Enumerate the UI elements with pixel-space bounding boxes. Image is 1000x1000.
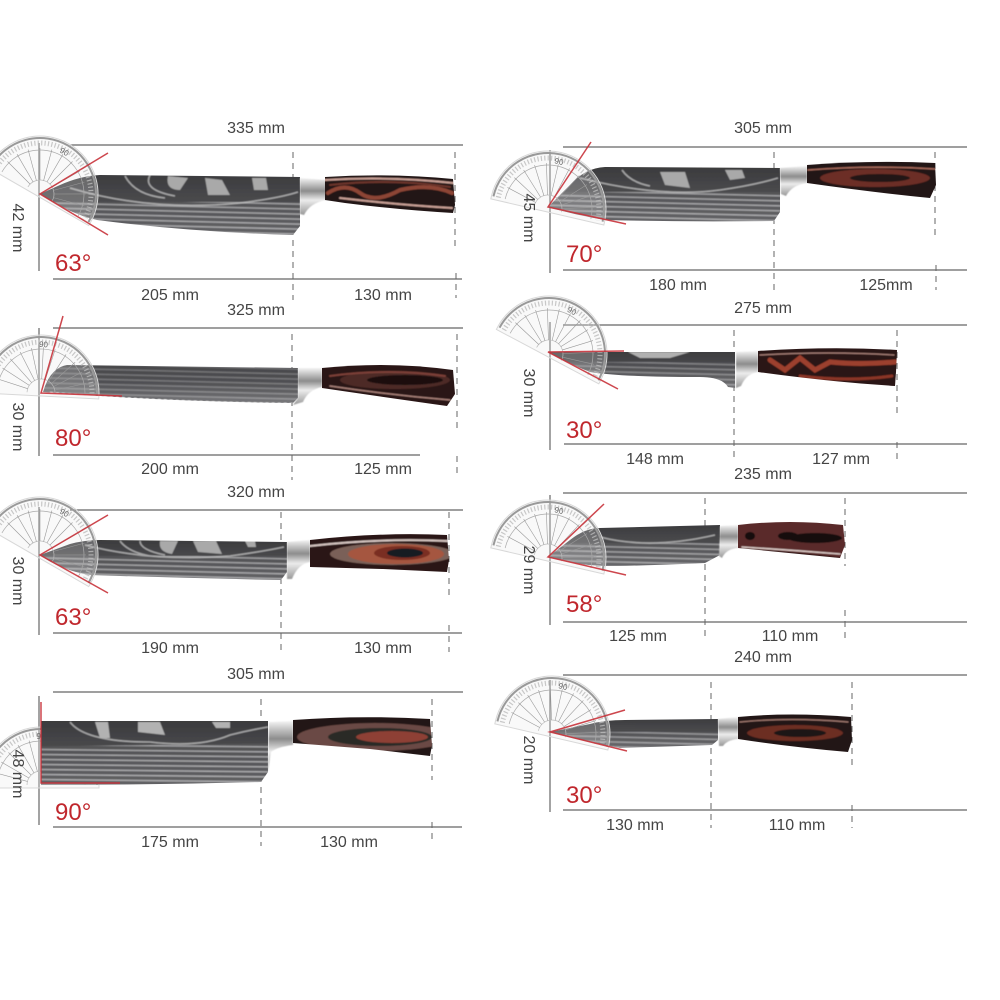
angle lines: [41, 316, 122, 396]
handle: [738, 522, 845, 558]
labels: 45 mm: [520, 194, 537, 242]
bolster: [268, 721, 293, 772]
protractor: [491, 488, 618, 574]
labels: 325 mm: [227, 302, 285, 319]
protractor: 90: [58, 507, 71, 519]
labels: 305 mm: [227, 666, 285, 683]
labels: [9, 302, 412, 478]
bolster: [718, 717, 738, 746]
handle: [293, 717, 432, 756]
angle lines: [40, 515, 108, 593]
knife 8: paring knife 240 mm: [495, 649, 967, 834]
labels: 190 mm: [141, 640, 199, 657]
knife 6: boning knife 275 mm: [496, 296, 967, 464]
blade: [551, 719, 718, 748]
angle lines: [548, 351, 624, 389]
protractor: 90: [37, 732, 46, 741]
bolster: [736, 351, 758, 388]
knife 1: chef knife 335 mm: [0, 115, 463, 304]
protractor: [496, 276, 627, 384]
bolster: [287, 540, 310, 579]
labels: 148 mm: [626, 451, 684, 468]
bolster: [719, 525, 738, 558]
knife 4: cleaver 305 mm: [0, 666, 463, 851]
labels: 130 mm: [320, 834, 378, 851]
labels: 130 mm: [354, 287, 412, 304]
labels: 125 mm: [354, 461, 412, 478]
dashed markers: [261, 699, 432, 846]
angle lines: [548, 504, 626, 575]
bolster: [780, 166, 807, 196]
dashed markers: [705, 498, 845, 640]
labels: 305 mm: [734, 120, 792, 137]
labels: 58°: [566, 591, 602, 618]
dimension lines: [39, 692, 463, 827]
labels: [520, 300, 870, 468]
labels: 175 mm: [141, 834, 199, 851]
labels: 30 mm: [9, 557, 26, 605]
protractor: 90: [558, 681, 569, 692]
dimension lines: [550, 493, 967, 625]
labels: 29 mm: [520, 546, 537, 594]
labels: 63°: [55, 604, 91, 631]
labels: 180 mm: [649, 277, 707, 294]
protractor: 90: [58, 146, 71, 158]
knife 5: santoku 305 mm: [491, 120, 967, 294]
blade: [548, 352, 735, 388]
blade: [40, 175, 300, 235]
bolster: [300, 178, 326, 215]
labels: [9, 666, 378, 851]
knife 7: utility knife 235 mm: [491, 466, 967, 645]
handle: [322, 365, 455, 406]
labels: 125mm: [859, 277, 913, 294]
labels: [520, 120, 913, 294]
protractor: [495, 664, 622, 750]
handle: [310, 534, 449, 572]
angle lines: [550, 710, 627, 751]
labels: 20 mm: [520, 736, 537, 784]
angle lines: [548, 142, 626, 224]
labels: 335 mm: [227, 120, 285, 137]
dashed markers: [281, 512, 449, 654]
labels: 130 mm: [606, 817, 664, 834]
protractor: 90: [554, 156, 565, 167]
protractor: 90: [566, 305, 578, 317]
labels: 200 mm: [141, 461, 199, 478]
dashed markers: [711, 682, 852, 828]
labels: 275 mm: [734, 300, 792, 317]
labels: 110 mm: [762, 628, 818, 645]
labels: [520, 649, 825, 834]
blade: [41, 721, 268, 785]
dashed markers: [734, 330, 897, 462]
blade: [40, 540, 287, 580]
handle: [325, 175, 455, 213]
protractor: [0, 476, 119, 587]
handle: [738, 714, 852, 752]
dimension lines: [39, 143, 463, 279]
labels: [520, 466, 818, 645]
labels: 320 mm: [227, 484, 285, 501]
dimension lines: [550, 675, 967, 812]
labels: 30 mm: [520, 369, 537, 417]
labels: 30 mm: [9, 403, 26, 451]
handle: [758, 348, 897, 386]
knife 2: bread knife 325 mm: [0, 302, 463, 480]
labels: 70°: [566, 241, 602, 268]
bolster: [293, 368, 322, 405]
blade: [43, 365, 298, 403]
protractor: [0, 332, 102, 399]
knife 3: slicing knife 320 mm: [0, 476, 463, 657]
dashed markers: [293, 152, 456, 300]
labels: 125 mm: [609, 628, 667, 645]
protractor: [0, 727, 99, 788]
protractor: 90: [554, 505, 565, 516]
angle lines: [41, 702, 120, 783]
labels: 240 mm: [734, 649, 792, 666]
labels: 80°: [55, 425, 91, 452]
dashed markers: [774, 152, 936, 290]
labels: 205 mm: [141, 287, 199, 304]
labels: 30°: [566, 417, 602, 444]
dimension lines: [39, 328, 463, 456]
labels: 235 mm: [734, 466, 792, 483]
labels: 30°: [566, 782, 602, 809]
labels: 110 mm: [769, 817, 825, 834]
protractor: 90: [39, 340, 49, 349]
labels: 127 mm: [812, 451, 870, 468]
labels: [9, 484, 412, 657]
labels: 42 mm: [9, 204, 26, 252]
labels: 48 mm: [9, 750, 26, 798]
dimension lines: [550, 147, 967, 273]
protractor: [0, 115, 119, 226]
angle lines: [40, 153, 108, 235]
labels: 130 mm: [354, 640, 412, 657]
labels: [9, 120, 412, 304]
blade: [548, 167, 780, 222]
dashed markers: [292, 334, 457, 480]
handle: [807, 162, 936, 198]
labels: 90°: [55, 799, 91, 826]
protractor: [491, 139, 618, 225]
dimension lines: [550, 322, 967, 450]
dimension lines: [39, 507, 463, 635]
labels: 63°: [55, 250, 91, 277]
blade: [548, 525, 720, 566]
